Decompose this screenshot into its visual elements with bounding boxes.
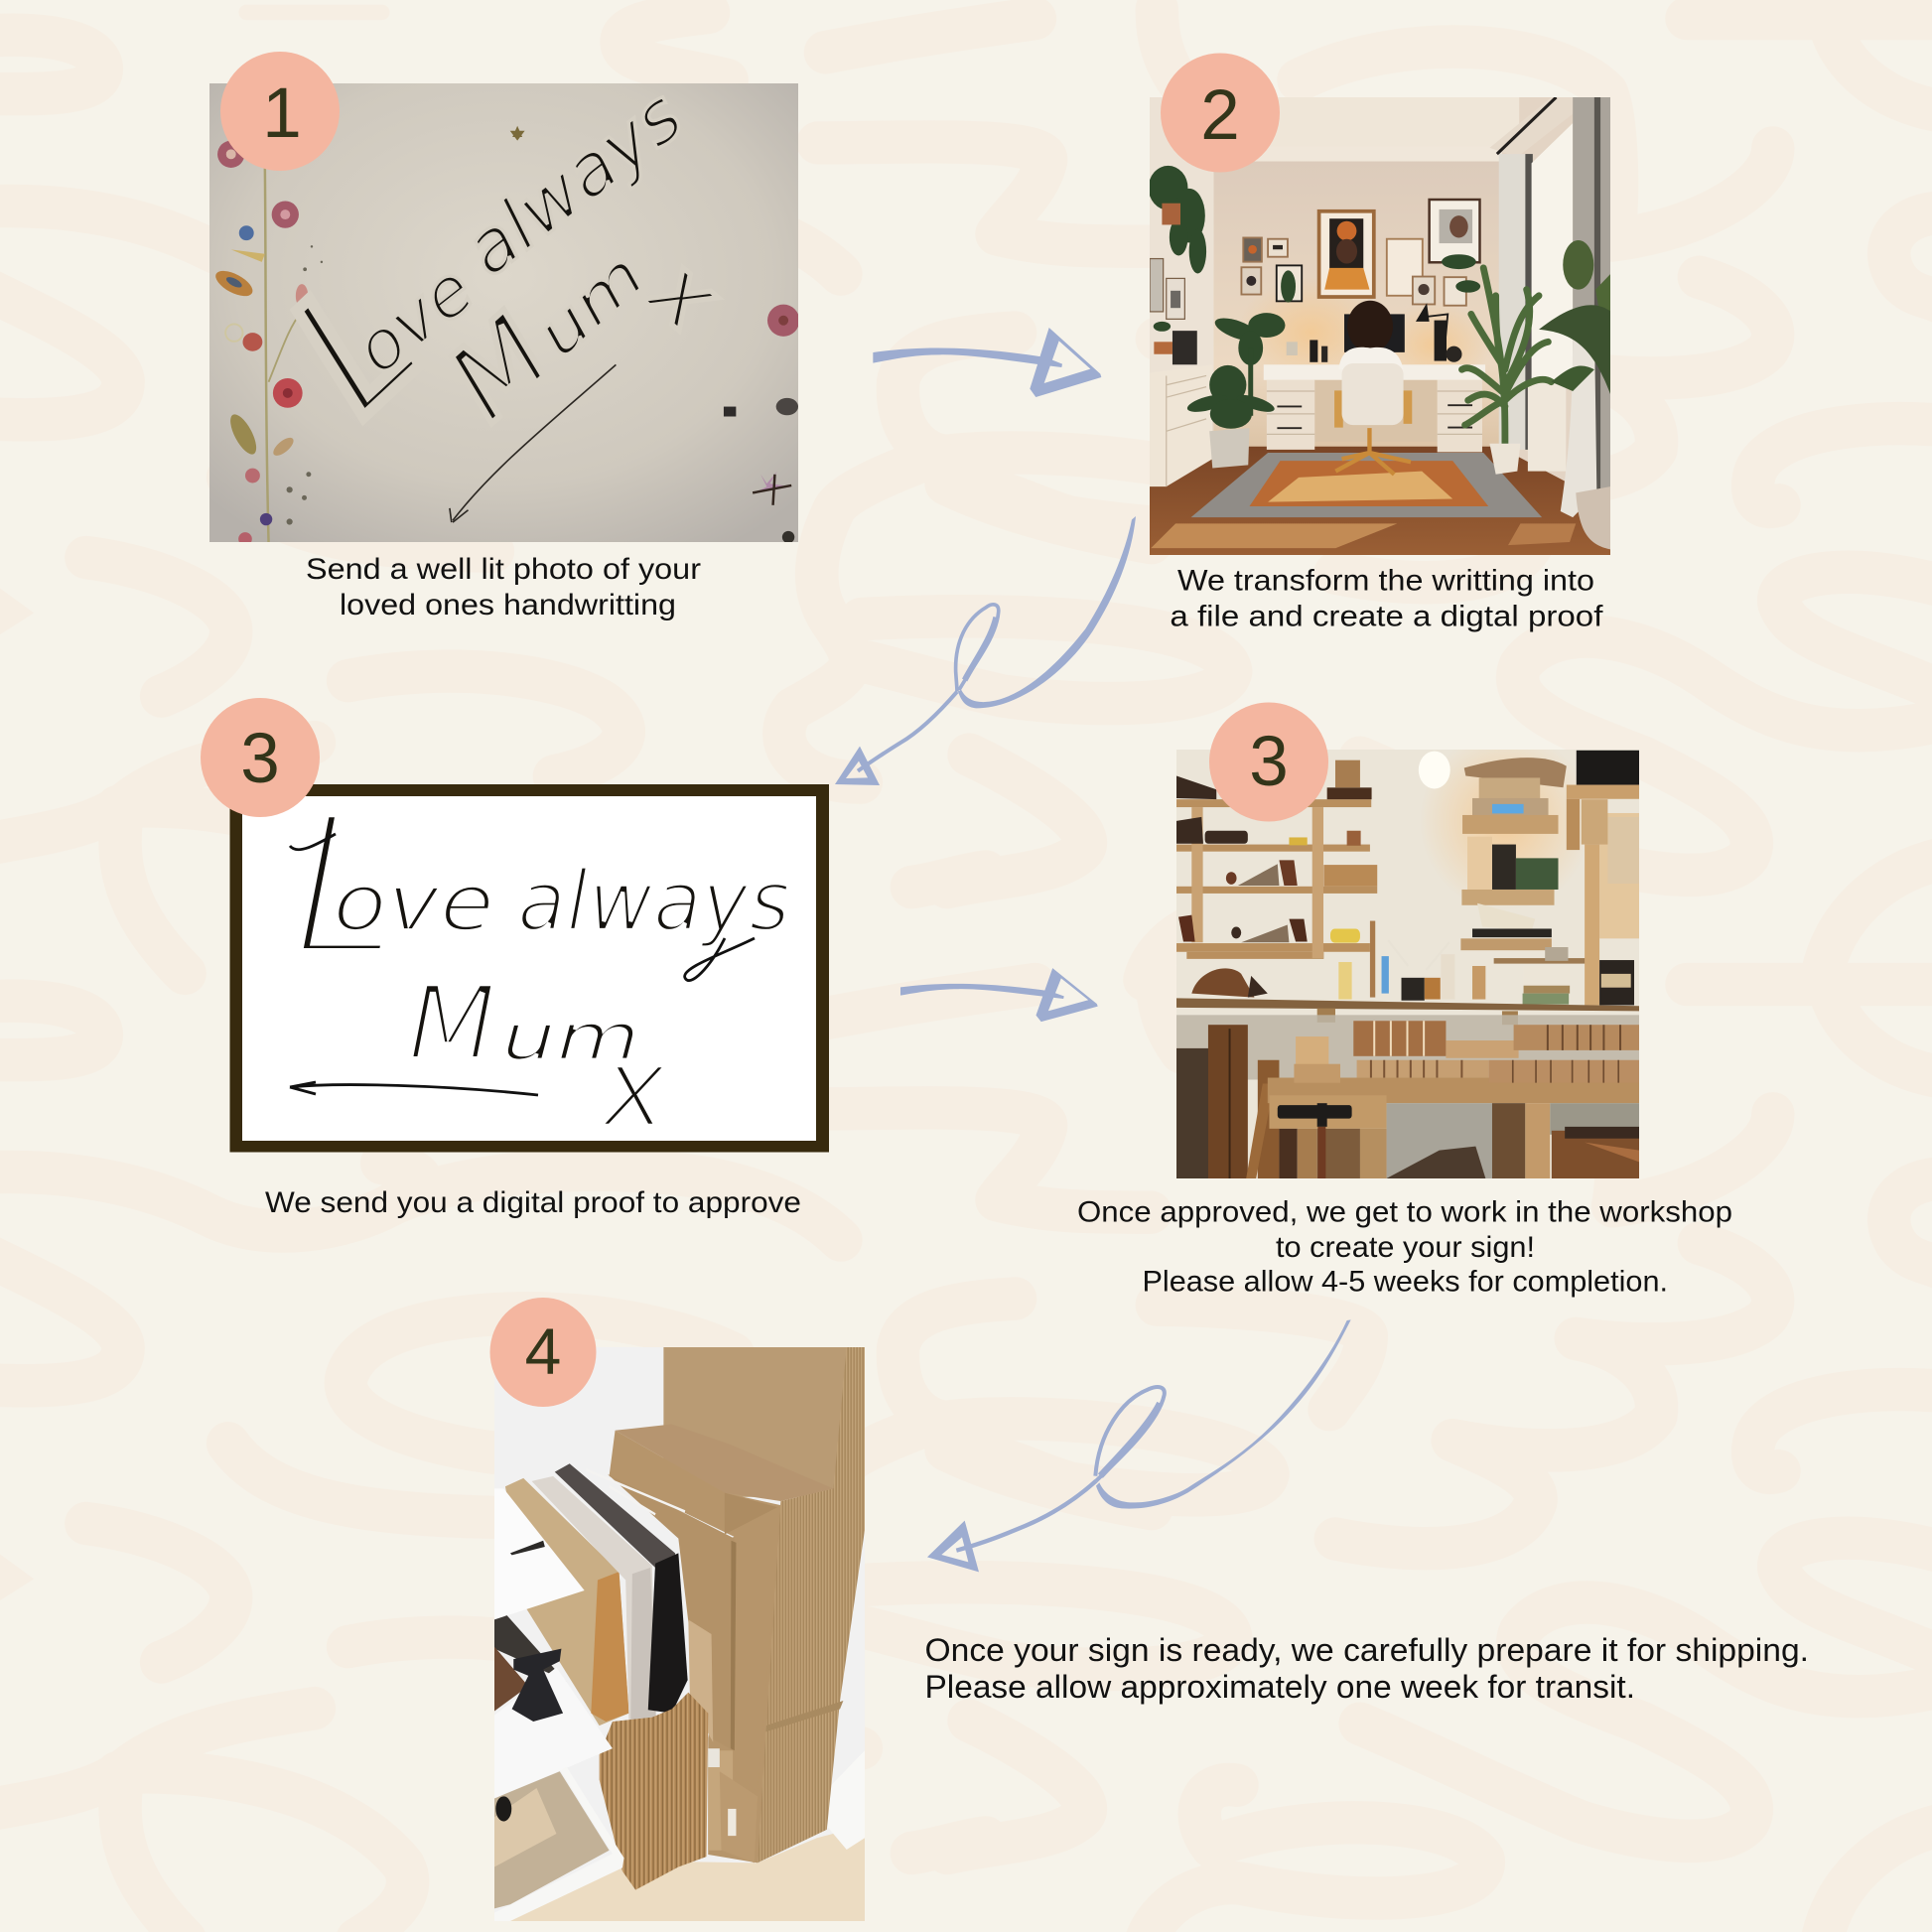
arrow: step 1 to step 2 — [873, 328, 1101, 397]
white shelves — [494, 1488, 585, 1619]
caption: step 1: loved ones handwritting — [340, 589, 676, 621]
black clamp — [512, 1649, 563, 1722]
wood blocks — [1296, 1036, 1328, 1066]
middle shelf items — [1338, 962, 1352, 1000]
handwriting: Mum x: um — [522, 239, 658, 371]
photo: packing materials — [494, 1347, 865, 1921]
handwriting: digitised Love always Mum x: M — [407, 963, 497, 1084]
handwriting: digitised Love always Mum x: always — [517, 853, 790, 951]
arrow: workshop to shipping — [927, 1319, 1351, 1572]
handwriting: digitised Love always Mum x: L — [290, 771, 400, 1003]
right post and speaker — [1577, 751, 1639, 785]
number badge 1 — [220, 52, 340, 171]
handwriting: digitised Love always Mum x — [290, 771, 790, 1155]
caption: workshop step: Please allow 4-5 weeks for completion. — [1142, 1265, 1668, 1299]
left shelves — [1176, 799, 1377, 959]
handwriting: digitised Love always Mum x: ove — [333, 857, 494, 949]
handwriting: Mum x: M — [425, 292, 574, 444]
flat cardboard sheets — [708, 1505, 780, 1863]
handwriting: digitised Love always Mum x: um — [501, 1001, 640, 1075]
back board — [663, 1347, 848, 1497]
caption: step 2: We transform the writting into — [1177, 564, 1594, 598]
handwriting: Love always: always — [449, 74, 698, 293]
caption: step 1: Send a well lit photo of your — [306, 553, 701, 586]
underline flourish — [290, 1082, 538, 1095]
floor — [510, 1826, 865, 1921]
left cabinet — [1150, 364, 1212, 486]
arrow: step 3 to workshop — [900, 968, 1098, 1022]
lamp and desk items — [1422, 314, 1448, 360]
person, monitor and chair — [1344, 314, 1405, 352]
handwriting: Love always: ove — [341, 250, 488, 390]
long low shelf — [1176, 998, 1639, 1011]
number badge 3 — [201, 698, 320, 817]
panel: step 2 digital proof — [1149, 54, 1610, 633]
bench vise — [1278, 1105, 1352, 1119]
number badge 1: 1 — [262, 74, 302, 153]
number badge 2: 2 — [1200, 76, 1240, 155]
handwriting: digitised Love always Mum x: x — [598, 1022, 670, 1155]
handwriting: Mum x: x — [627, 233, 741, 353]
workbench — [1268, 1078, 1639, 1103]
plants — [1149, 166, 1480, 429]
handwriting: Love always — [254, 74, 698, 450]
number badge 4: 4 — [525, 1314, 561, 1388]
caption: workshop step: to create your sign! — [1276, 1231, 1535, 1264]
photo: handwritten card — [209, 74, 798, 542]
floor and rug — [1150, 447, 1610, 555]
white rods — [586, 1470, 685, 1514]
handwriting: Mum x — [425, 233, 741, 444]
right shelves and boxes — [1464, 758, 1567, 787]
hand tools on shelves — [1176, 775, 1355, 941]
caption: shipping: Please allow approximately one week for transit. — [925, 1669, 1635, 1705]
caption: workshop step: Once approved, we get to work in the workshop — [1077, 1195, 1732, 1229]
number badge 3 workshop: 3 — [1249, 723, 1289, 801]
number badge 2 — [1161, 54, 1280, 173]
lower box piles — [600, 1693, 708, 1890]
paper rolls — [505, 1478, 629, 1725]
caption: step 3: We send you a digital proof to approve — [265, 1186, 801, 1219]
corrugated stack — [758, 1347, 865, 1863]
number badge 3 workshop — [1209, 703, 1328, 822]
photo: home office — [1150, 97, 1610, 555]
panel: step 4 shipping — [490, 1298, 865, 1921]
proof frame — [230, 784, 829, 1152]
photo: woodworking workshop — [1176, 750, 1639, 1178]
underline flourish — [450, 364, 616, 522]
arrow: step 2 to step 3 — [835, 516, 1136, 785]
panel: step 1 send a photo — [209, 52, 799, 621]
desk — [1264, 364, 1485, 380]
lower wall and wood — [1176, 1015, 1639, 1079]
number badge 3: 3 — [240, 720, 280, 798]
caption: shipping: Once your sign is ready, we carefully prepare it for shipping. — [925, 1632, 1809, 1668]
caption: step 2: a file and create a digtal proof — [1170, 600, 1603, 633]
panel: workshop step — [1077, 703, 1740, 1299]
panel: step 3 digital proof approval — [201, 698, 829, 1219]
number badge 4 — [490, 1298, 596, 1407]
handwriting: Love always: L — [254, 242, 457, 450]
artworks — [1317, 209, 1376, 299]
